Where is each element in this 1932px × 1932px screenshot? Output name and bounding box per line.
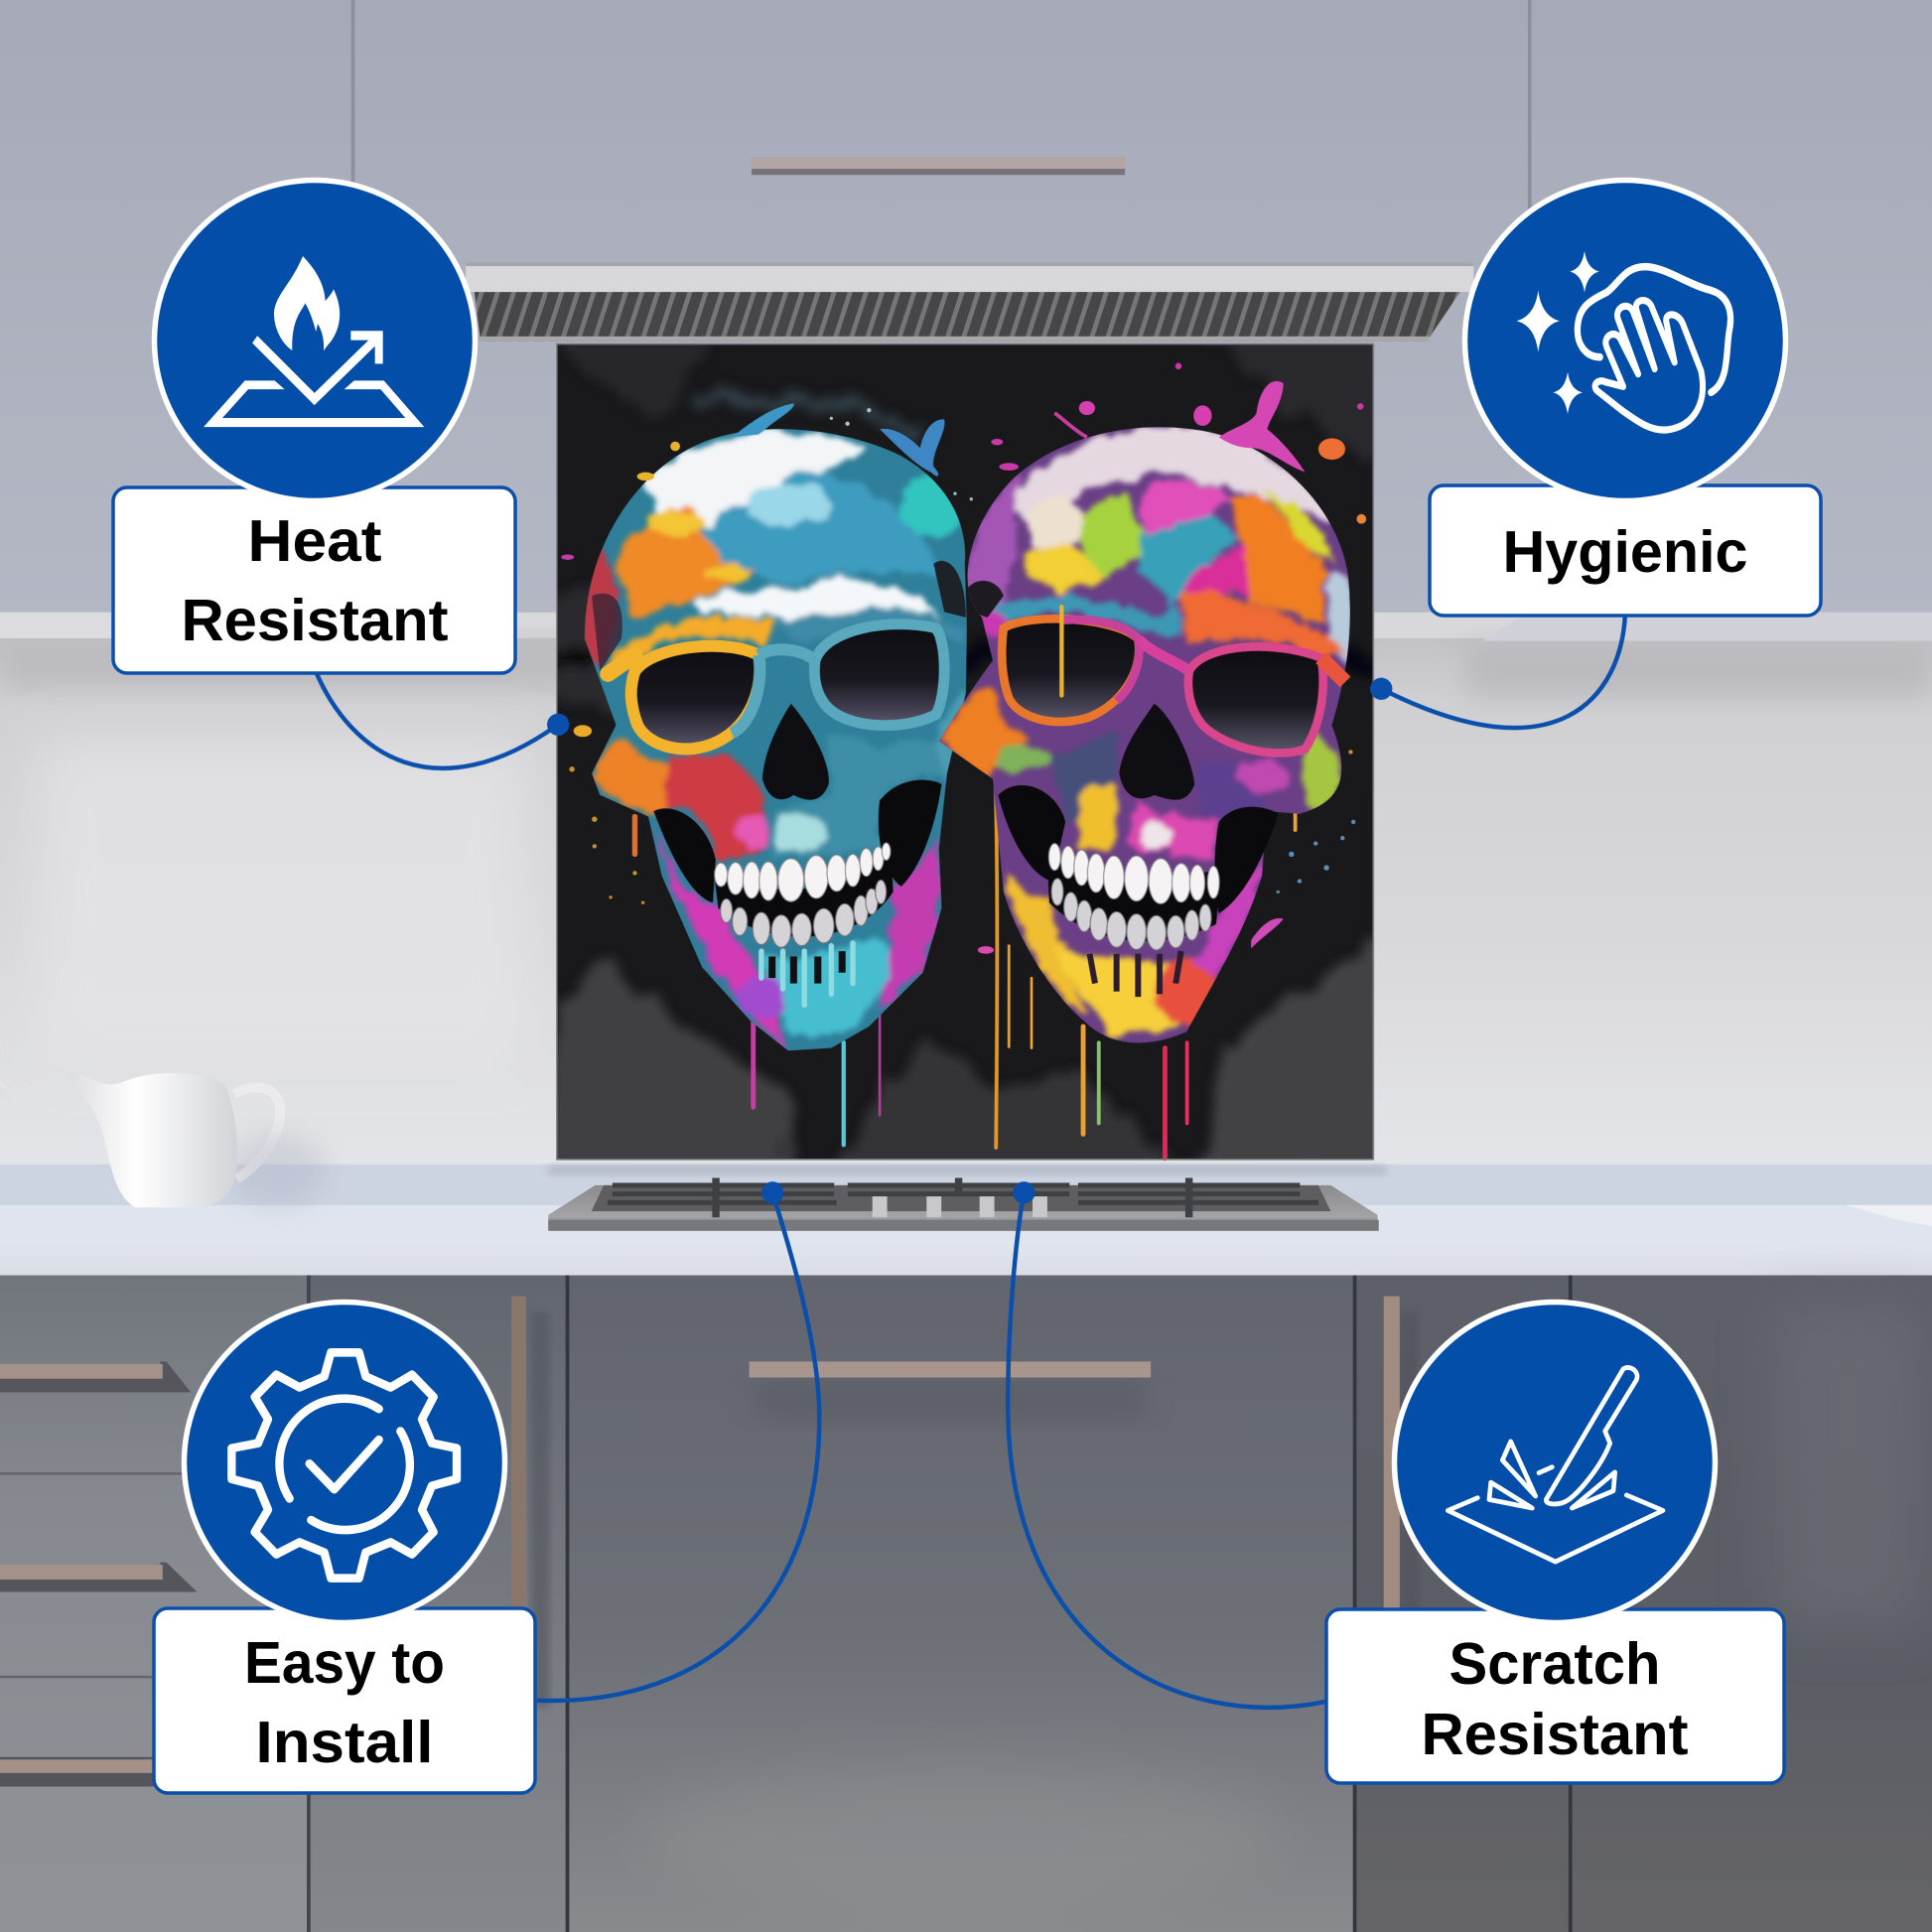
badge circle	[1394, 1303, 1716, 1622]
label box	[154, 1608, 535, 1793]
heading: Easy to	[244, 1629, 445, 1696]
connector: heat resistant	[314, 668, 569, 768]
lower cabinets	[0, 1276, 1932, 1932]
extractor hood	[466, 262, 1473, 342]
callout: heat resistant	[113, 181, 515, 673]
right skull glasses	[1002, 607, 1345, 754]
badge circle	[185, 1303, 504, 1622]
icon: gear with check mark	[227, 1348, 461, 1583]
label box	[113, 487, 515, 673]
teapot	[68, 1072, 327, 1207]
left skull mouth and teeth	[653, 780, 941, 1005]
right skull	[933, 418, 1359, 1159]
heading: Scratch	[1449, 1630, 1660, 1697]
badge circle	[1465, 181, 1785, 500]
left skull	[579, 418, 977, 1145]
callout: scratch resistant	[1326, 1303, 1784, 1783]
gas hob	[548, 1177, 1379, 1231]
heading line 2: Resistant	[1422, 1701, 1689, 1767]
left skull eye socket shade	[592, 594, 622, 671]
heading: Hygienic	[1503, 518, 1747, 585]
right skull drips	[996, 768, 1296, 1159]
cabinet handles	[0, 1297, 1418, 1787]
badge circle	[155, 181, 475, 500]
artwork panel: two paint-splashed skulls with sunglasses	[556, 344, 1374, 1162]
left skull drips	[634, 816, 880, 1145]
heading line 2: Install	[256, 1709, 433, 1775]
heading: Heat	[248, 507, 382, 574]
icon: knife scratching surface	[1446, 1365, 1666, 1565]
connector: easy to install	[537, 1181, 819, 1701]
brush strokes	[535, 327, 1397, 1177]
heading line 2: Resistant	[181, 587, 449, 653]
callout: hygienic	[1430, 181, 1821, 616]
wall tiles	[0, 613, 1932, 1166]
callout: easy to install	[154, 1303, 535, 1793]
countertop	[0, 1165, 1932, 1277]
upper cabinet handle	[752, 158, 1125, 175]
left skull glasses	[608, 624, 944, 749]
right skull mouth and teeth	[998, 785, 1278, 950]
icon: flame over deflected arrow	[204, 256, 425, 427]
connector: hygienic	[1370, 614, 1625, 728]
label box	[1326, 1609, 1784, 1783]
upper cabinets	[0, 0, 1932, 613]
icon: hand wiping with sparkles	[1517, 251, 1733, 434]
right skull nose	[1119, 704, 1194, 800]
label box	[1430, 485, 1821, 616]
connector: scratch resistant	[1008, 1181, 1325, 1708]
left skull nose	[762, 704, 829, 800]
paint splatters	[561, 362, 1366, 954]
